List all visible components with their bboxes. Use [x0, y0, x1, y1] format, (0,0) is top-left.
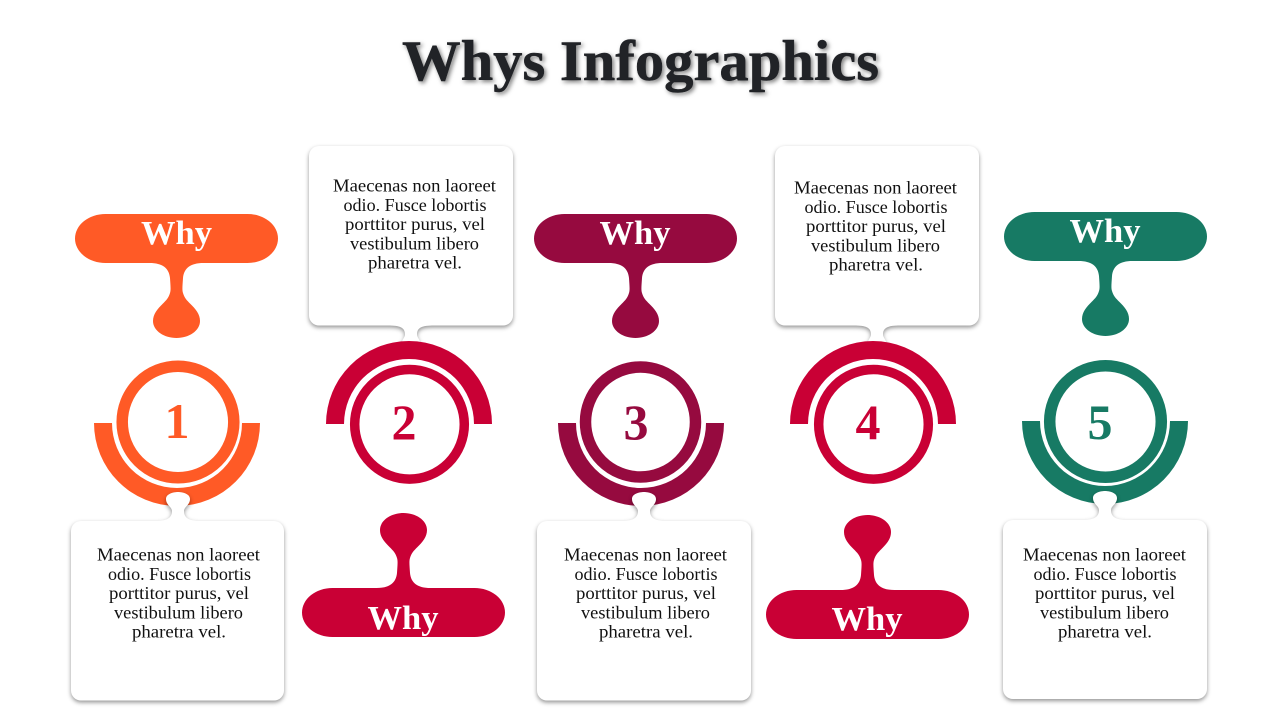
number ring 3: [558, 367, 724, 506]
text card 4: pharetra vel.: [829, 254, 923, 274]
why tag 4: [766, 515, 969, 639]
text card 4: porttitor purus, vel: [806, 216, 946, 236]
why tag 1: Why: [141, 215, 212, 252]
number ring 4: 4: [856, 394, 880, 450]
text card 4: Maecenas non laoreet: [794, 178, 957, 198]
title: Whys Infographics: [402, 30, 879, 93]
text card 3: odio. Fusce lobortis: [574, 564, 718, 584]
text card 1: vestibulum libero: [114, 602, 243, 622]
text card 5: Maecenas non laoreet: [1023, 544, 1186, 564]
text card 5: pharetra vel.: [1058, 622, 1152, 642]
text card 2: Maecenas non laoreet: [333, 176, 496, 196]
number ring 5: [1022, 366, 1188, 504]
text card 3: porttitor purus, vel: [576, 583, 716, 603]
number ring 2: [326, 341, 492, 479]
text card 5: vestibulum libero: [1040, 602, 1169, 622]
text card 2: porttitor purus, vel: [345, 214, 485, 234]
number ring 4: [790, 341, 956, 479]
column 1: orange: [71, 214, 284, 700]
text card 3: [537, 492, 751, 700]
text card 1: Maecenas non laoreet: [97, 544, 260, 564]
text card 1: porttitor purus, vel: [109, 583, 249, 603]
text card 1: odio. Fusce lobortis: [108, 564, 251, 584]
number ring 3: 3: [624, 394, 648, 450]
text card 4: vestibulum libero: [811, 236, 940, 256]
text card 3: Maecenas non laoreet: [564, 544, 727, 564]
text card 2: [309, 146, 513, 342]
text card 5: porttitor purus, vel: [1035, 583, 1175, 603]
text card 3: pharetra vel.: [599, 622, 693, 642]
text card 3: vestibulum libero: [581, 602, 710, 622]
number ring 1: 1: [164, 393, 190, 449]
column 5: green: [1003, 212, 1207, 699]
why tag 5: Why: [1070, 213, 1140, 250]
text card 2: vestibulum libero: [350, 234, 479, 254]
text card 2: pharetra vel.: [368, 252, 462, 272]
text card 4: odio. Fusce lobortis: [804, 197, 948, 217]
why tag 1: [75, 214, 278, 338]
why tag 4: Why: [832, 601, 902, 638]
why tag 3: Why: [600, 215, 670, 252]
why tag 5: [1004, 212, 1207, 336]
text card 1: pharetra vel.: [132, 622, 226, 642]
number ring 2: 2: [392, 394, 416, 450]
text card 2: odio. Fusce lobortis: [344, 195, 487, 215]
text card 1: [71, 492, 284, 700]
text card 4: [775, 146, 979, 342]
column 3: wine: [534, 214, 751, 700]
text card 5: [1003, 491, 1207, 699]
why tag 2: [302, 513, 505, 637]
why tag 2: Why: [368, 600, 438, 637]
why tag 3: [534, 214, 737, 338]
number ring 1: [94, 366, 260, 506]
column 2: crimson: [302, 146, 513, 637]
column 4: crimson: [766, 146, 979, 639]
number ring 5: 5: [1088, 394, 1112, 450]
text card 5: odio. Fusce lobortis: [1034, 564, 1177, 584]
